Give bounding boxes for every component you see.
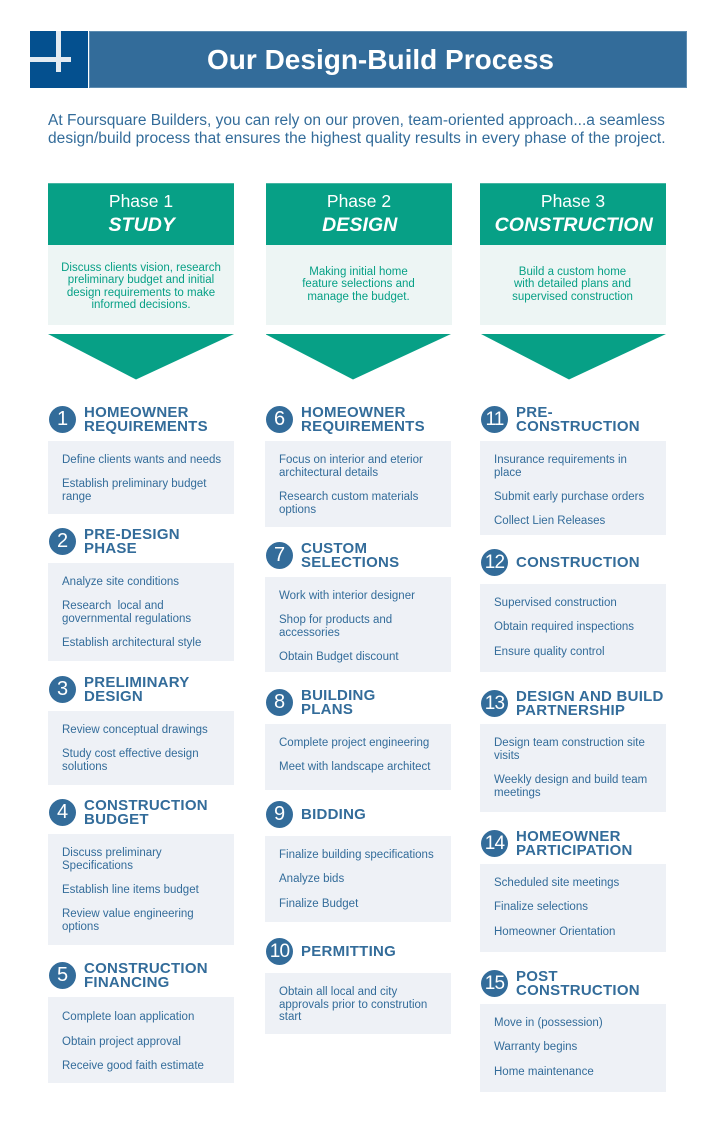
step 1 items: Establish preliminary budget [62,478,206,490]
step 3 items: Review conceptual drawings [62,724,208,736]
step 8 heading: BUILDING [301,687,376,704]
phase 3 header: CONSTRUCTION [495,214,653,236]
step 11 [480,404,666,535]
intro text: design/build process that ensures the highest quality results in every phase of the project. [48,130,666,147]
phase 1 column [48,183,234,380]
step 10 items: Obtain all local and city [279,986,397,998]
step 9 number [266,800,293,828]
step 6 number: 6 [274,408,285,430]
step 2 items: governmental regulations [62,612,191,624]
step 3 number: 3 [57,678,68,700]
step 7 heading: CUSTOM [301,540,367,557]
step 6 [265,404,451,527]
phase 3 arrow [481,334,666,380]
step 14 number [481,830,508,856]
step 10 [265,938,451,1034]
step 8 heading [301,687,376,718]
step 13 heading [516,688,664,719]
step 14 heading: PARTICIPATION [516,842,633,859]
step 7 number: 7 [274,544,285,566]
step 1 number: 1 [57,408,68,430]
step 2 heading [84,526,180,557]
step 9 items: Analyze bids [279,873,344,885]
step 8 items: Meet with landscape architect [279,761,430,773]
step 5 items: Complete loan application [62,1011,194,1023]
step 2 items: Research local and [62,600,164,612]
step 5 number: 5 [57,964,68,986]
phase 3 description: with detailed plans and [514,278,631,290]
step 9 [265,801,451,922]
phase 2 description: Making initial home [309,266,408,278]
step 13 items: Design team construction site [494,737,645,749]
step 12 number [481,548,508,576]
step 4 [48,797,234,945]
step 13 [480,688,666,812]
step 11 items: Collect Lien Releases [494,515,605,527]
step 6 heading: HOMEOWNER [301,404,406,421]
step 7 items: Shop for products and [279,614,392,626]
step 1 [48,404,234,514]
step 1 number [49,406,76,432]
step 15 items: Move in (possession) [494,1017,603,1029]
step 4 items: Review value engineering [62,908,194,920]
step 7 heading [301,540,399,571]
step 14 items: Homeowner Orientation [494,926,615,938]
phase 1 description: preliminary budget and initial [68,274,214,286]
phase 2 column [266,183,452,380]
step 4 items: Specifications [62,860,133,872]
step 15 number [481,970,508,996]
step 4 number [49,798,76,826]
step 8 items [265,724,451,790]
step 9 items: Finalize building specifications [279,849,434,861]
step 12 items [480,584,666,672]
step 2 heading: PRE-DESIGN [84,526,180,543]
step 3 heading [84,674,190,705]
phase 3 header [480,183,666,245]
step 13 items [480,724,666,812]
step 14 heading [516,828,633,859]
step 4 number: 4 [57,800,68,822]
step 7 [265,540,451,672]
step 3 items: solutions [62,760,107,772]
step 12 items: Obtain required inspections [494,621,634,633]
step 15 heading: CONSTRUCTION [516,982,640,999]
step 9 items [265,836,451,922]
step 1 items: range [62,490,91,502]
phase 1 description: design requirements to make [67,286,215,298]
phase 2 description: feature selections and [302,278,415,290]
step 7 items: Work with interior designer [279,590,415,602]
step 8 [265,687,451,790]
step 14 items: Finalize selections [494,901,588,913]
step 5 [48,960,234,1083]
step 2 number [49,528,76,554]
phase 2 header: DESIGN [322,214,397,236]
step 13 heading: PARTNERSHIP [516,702,625,719]
phase 2 description: manage the budget. [307,290,410,302]
step 7 items: Obtain Budget discount [279,651,399,663]
step 13 number: 13 [485,692,504,714]
phase 2 arrow [266,334,451,380]
phase 3 header: Phase 3 [541,191,605,211]
step 6 items: Research custom materials [279,491,418,503]
step 11 items: Submit early purchase orders [494,491,644,503]
step 1 heading: HOMEOWNER [84,404,189,421]
intro text [48,112,666,147]
step 6 heading [301,404,425,435]
step 13 items: Weekly design and build team [494,774,647,786]
step 15 items: Warranty begins [494,1041,577,1053]
step 11 heading [516,404,640,435]
step 8 number [266,688,293,716]
step 6 heading: REQUIREMENTS [301,418,425,435]
phase 1 description: informed decisions. [91,299,191,311]
phase 1 header: STUDY [108,214,175,236]
phase 3 column [480,183,666,380]
step 13 items: meetings [494,786,541,798]
step 8 number: 8 [274,690,285,712]
step 4 items: Discuss preliminary [62,847,162,859]
phase 2 header [266,183,452,245]
step 12 heading: CONSTRUCTION [516,554,640,571]
step 2 number: 2 [57,530,68,552]
step 9 number: 9 [274,802,285,824]
step 2 items: Analyze site conditions [62,576,179,588]
logo cross horizontal [30,57,71,62]
step 12 [480,549,666,672]
step 15 items: Home maintenance [494,1066,594,1078]
step 10 number: 10 [270,940,289,962]
step 6 number [266,406,293,432]
step 11 items: place [494,466,522,478]
step 11 number: 11 [485,408,504,430]
step 3 number [49,676,76,702]
step 7 items: accessories [279,626,340,638]
step 8 heading: PLANS [301,701,353,718]
title text: Our Design-Build Process [207,44,554,75]
phase 1 arrow [48,334,234,380]
step 14 number: 14 [485,832,504,854]
phase 2 description [266,245,452,325]
step 11 heading: CONSTRUCTION [516,418,640,435]
title banner [89,31,687,88]
step 5 items: Obtain project approval [62,1036,181,1048]
step 12 items: Supervised construction [494,597,617,609]
intro text: At Foursquare Builders, you can rely on our proven, team-oriented approach...a seamless [48,112,665,129]
step 9 items: Finalize Budget [279,898,358,910]
step 5 heading: FINANCING [84,974,170,991]
step 11 number [481,406,508,432]
phase 1 header: Phase 1 [109,191,173,211]
step 14 items: Scheduled site meetings [494,877,619,889]
step 12 number: 12 [485,552,504,572]
step 3 items [48,711,234,785]
step 9 heading: BIDDING [301,806,366,823]
step 1 heading [84,404,208,435]
step 5 heading: CONSTRUCTION [84,960,208,977]
step 15 items [480,1004,666,1092]
step 7 items [265,577,451,672]
step 4 items: options [62,920,99,932]
step 6 items: Focus on interior and eterior [279,454,423,466]
step 10 items: approvals prior to constrution [279,998,427,1010]
step 15 number: 15 [485,972,504,994]
phase 2 header: Phase 2 [327,191,391,211]
step 1 heading: REQUIREMENTS [84,418,208,435]
phase 3 description: Build a custom home [519,266,626,278]
step 10 heading: PERMITTING [301,943,396,960]
step 4 heading: CONSTRUCTION [84,797,208,814]
step 6 items: options [279,504,316,516]
step 2 items [48,563,234,661]
step 3 items: Study cost effective design [62,748,199,760]
step 14 heading: HOMEOWNER [516,828,621,845]
step 2 heading: PHASE [84,540,137,557]
step 1 items [48,441,234,514]
step 4 items [48,834,234,945]
step 6 items: architectural details [279,466,378,478]
phase 3 description [480,245,666,325]
step 14 [480,828,666,952]
step 10 number [266,938,293,964]
step 11 items [480,441,666,535]
step 15 heading: POST [516,968,558,985]
step 3 heading: PRELIMINARY [84,674,190,691]
step 15 [480,968,666,1092]
step 13 heading: DESIGN AND BUILD [516,688,664,705]
step 5 number [49,962,76,988]
step 4 heading: BUDGET [84,811,149,828]
step 13 number [481,690,508,716]
logo square [30,31,88,88]
phase 1 description [48,245,234,325]
step 4 heading [84,797,208,828]
step 11 items: Insurance requirements in [494,454,627,466]
step 7 heading: SELECTIONS [301,554,399,571]
phase 1 description: Discuss clients vision, research [61,262,221,274]
step 2 [48,526,234,661]
step 13 items: visits [494,750,520,762]
step 4 items: Establish line items budget [62,884,199,896]
step 1 items: Define clients wants and needs [62,454,221,466]
step 15 heading [516,968,640,999]
logo cross vertical [56,31,60,72]
step 3 [48,674,234,785]
phase 3 description: supervised construction [512,290,633,302]
step 5 items [48,997,234,1083]
step 5 heading [84,960,208,991]
step 8 items: Complete project engineering [279,737,429,749]
step 14 items [480,864,666,952]
step 3 heading: DESIGN [84,688,143,705]
step 12 items: Ensure quality control [494,646,605,658]
step 10 items: start [279,1011,301,1023]
step 11 heading: PRE- [516,404,553,421]
step 2 items: Establish architectural style [62,637,201,649]
step 5 items: Receive good faith estimate [62,1060,204,1072]
step 6 items [265,441,451,527]
step 10 items [265,973,451,1034]
step 7 number [266,542,293,568]
phase 1 header [48,183,234,245]
